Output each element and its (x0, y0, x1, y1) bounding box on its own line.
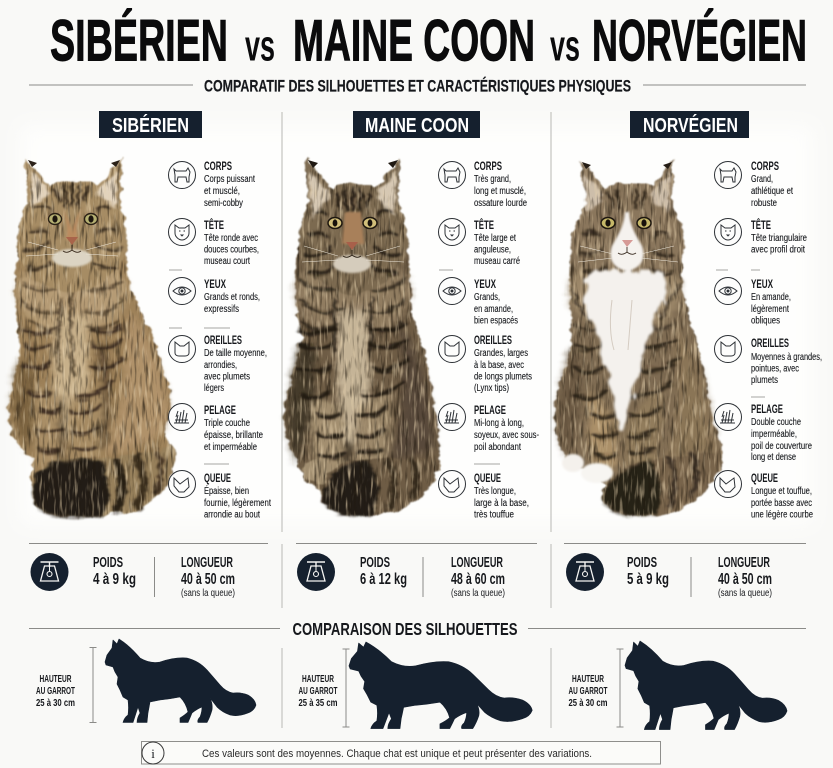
trait: corps: CORPS (474, 159, 502, 173)
trait: corps: ossature lourde (474, 198, 527, 209)
trait: pelage (168, 403, 263, 453)
poids: POIDS (93, 555, 123, 571)
silhouette: Maine Coon (349, 642, 532, 729)
height bracket: Maine Coon (342, 649, 350, 727)
trait: queue: très touffue (474, 510, 514, 520)
trait: queue (714, 470, 813, 520)
height label: Norvégien: AU GARROT (568, 685, 608, 697)
trait: yeux: En amande, (751, 292, 791, 303)
poids (360, 555, 407, 588)
heading: comparaison: COMPARAISON DES SILHOUETTES (292, 619, 518, 639)
silhouette: Norvégien (625, 641, 787, 730)
icon: scale (297, 553, 335, 591)
trait: yeux: YEUX (751, 277, 773, 291)
trait: yeux (168, 277, 260, 315)
white chest (582, 269, 667, 432)
trait: yeux: en amande, (474, 304, 513, 315)
trait: oreilles (438, 333, 532, 394)
trait: yeux (714, 277, 791, 326)
trait: oreilles: (Lynx tips) (474, 383, 509, 394)
height label: Sibérien: 25 à 30 cm (36, 697, 75, 709)
longueur: LONGUEUR (181, 555, 233, 571)
trait: tête (168, 217, 259, 267)
trait: queue: Épaisse, bien (204, 484, 249, 497)
icon: info (142, 742, 164, 764)
trait: queue: large à la base, (474, 498, 529, 509)
stats: Norvégien (566, 553, 772, 599)
trait: yeux: Grands et ronds, (204, 292, 260, 303)
trait: pelage: soyeux, avec sous- (474, 430, 539, 441)
height label: Sibérien: HAUTEUR (40, 673, 72, 685)
trait: oreilles (714, 336, 822, 386)
trait: oreilles: plumets (751, 375, 778, 386)
height label: Norvégien: HAUTEUR (572, 673, 604, 685)
trait: corps: CORPS (204, 159, 232, 173)
poids: 6 à 12 kg (360, 571, 407, 588)
height label: Norvégien (568, 673, 608, 709)
height bracket: Norvégien (616, 649, 624, 727)
badge: Maine Coon: MAINE COON (365, 115, 469, 137)
trait: pelage: PELAGE (751, 402, 783, 416)
trait: corps: et musclé, (204, 186, 240, 197)
title: vs (245, 22, 275, 70)
trait: corps: long et musclé, (474, 186, 526, 197)
trait: queue: portée basse avec (751, 498, 812, 509)
cat: Sibérien (8, 158, 175, 518)
height label: Maine Coon: 25 à 35 cm (298, 697, 338, 709)
trait: pelage: et imperméable (204, 442, 257, 453)
poids: 4 à 9 kg (93, 571, 136, 588)
trait: tête (438, 217, 520, 267)
poids: 5 à 9 kg (627, 571, 669, 588)
height label: Maine Coon (298, 673, 338, 709)
trait: oreilles: à la base, avec (474, 360, 524, 371)
trait: queue: QUEUE (474, 471, 501, 485)
trait: queue (168, 470, 271, 520)
trait: tête: TÊTE (474, 217, 494, 232)
poids: POIDS (360, 555, 390, 571)
trait: oreilles: De taille moyenne, (204, 348, 267, 359)
height label: Maine Coon: AU GARROT (298, 685, 338, 697)
badge: Norvégien: NORVÉGIEN (643, 114, 738, 137)
badge: Sibérien (99, 111, 202, 138)
icon: scale (566, 553, 604, 591)
trait: yeux: Grands, (474, 292, 500, 303)
trait: oreilles: de longs plumets (474, 372, 532, 382)
stats: Maine Coon (297, 553, 505, 599)
trait: yeux: légèrement (751, 304, 789, 315)
trait: pelage: Double couche (751, 417, 801, 428)
trait: oreilles: OREILLES (474, 333, 512, 347)
trait: corps: Très grand, (474, 174, 511, 185)
trait: yeux: bien espacés (474, 316, 518, 326)
trait: tête: Tête ronde avec (204, 233, 258, 244)
trait: yeux: expressifs (204, 304, 239, 315)
trait: oreilles: pointues, avec (751, 364, 799, 374)
trait: corps: Corps puissant (204, 174, 255, 185)
trait: pelage: poil de couverture (751, 441, 812, 452)
longueur (718, 555, 772, 599)
trait: corps: robuste (751, 198, 777, 209)
trait: tête: museau carré (474, 256, 520, 267)
note text: Ces valeurs sont des moyennes. Chaque chat est unique et peut présenter des variations. (202, 748, 592, 760)
trait: queue: QUEUE (751, 471, 778, 485)
trait: tête: Tête triangulaire (751, 233, 807, 244)
trait: pelage: imperméable, (751, 429, 797, 440)
trait: pelage: poil abondant (474, 442, 521, 453)
trait: tête: anguleuse, (474, 244, 511, 256)
height label: Norvégien: 25 à 30 cm (568, 697, 608, 709)
poids (93, 555, 136, 588)
longueur: (sans la queue) (718, 588, 772, 599)
title (50, 8, 807, 74)
longueur: 48 à 60 cm (451, 571, 505, 588)
trait: tête: museau court (204, 256, 250, 267)
badge: Maine Coon (353, 111, 480, 138)
trait: corps: CORPS (751, 159, 779, 173)
trait: tête: Tête large et (474, 233, 516, 244)
longueur: 40 à 50 cm (181, 571, 235, 588)
longueur: (sans la queue) (181, 588, 235, 599)
subtitle: COMPARATIF DES SILHOUETTES ET CARACTÉRISTIQUES PHYSIQUES (204, 76, 631, 96)
trait: pelage: Triple couche (204, 418, 250, 429)
trait: pelage: PELAGE (204, 403, 236, 417)
cat: Maine Coon (284, 158, 440, 517)
trait: oreilles: Grandes, larges (474, 348, 528, 359)
longueur: (sans la queue) (451, 588, 505, 599)
trait: pelage: épaisse, brillante (204, 430, 263, 441)
trait: pelage: PELAGE (474, 403, 506, 417)
cat: Norvégien (554, 160, 722, 517)
trait: yeux: obliques (751, 316, 780, 326)
badge: Sibérien: SIBÉRIEN (112, 114, 189, 137)
trait: oreilles: avec plumets (204, 372, 250, 382)
trait: queue: arrondie au bout (204, 510, 260, 520)
traits: Sibérien (168, 159, 271, 520)
title: vs (550, 22, 580, 70)
traits: Norvégien (714, 159, 822, 520)
trait: oreilles: OREILLES (751, 336, 789, 350)
height bracket: Sibérien (90, 648, 96, 722)
trait: queue: QUEUE (204, 471, 231, 485)
longueur: LONGUEUR (718, 555, 770, 571)
trait: tête: avec profil droit (751, 244, 805, 256)
trait: tête: TÊTE (204, 217, 224, 232)
trait: pelage (714, 402, 812, 463)
trait: corps: Grand, (751, 174, 773, 185)
trait: yeux: YEUX (474, 277, 496, 291)
note box (142, 742, 660, 764)
trait: tête (714, 217, 807, 256)
badge: Norvégien (630, 111, 749, 138)
trait: oreilles: légers (204, 383, 224, 394)
silhouette: Sibérien (105, 639, 256, 722)
trait: corps: semi-cobby (204, 198, 243, 209)
trait: queue: Très longue, (474, 486, 516, 497)
icon: scale (30, 553, 68, 591)
trait: tête: TÊTE (751, 217, 771, 232)
trait: corps (714, 159, 793, 209)
trait: yeux: YEUX (204, 277, 226, 291)
trait: pelage (438, 403, 539, 453)
trait: queue (438, 470, 529, 520)
title: SIBÉRIEN (50, 8, 228, 74)
longueur: 40 à 50 cm (718, 571, 772, 588)
poids (627, 555, 669, 588)
trait: corps (438, 159, 527, 209)
poids: POIDS (627, 555, 657, 571)
stats: Sibérien (30, 553, 235, 599)
title: MAINE COON (293, 8, 535, 74)
trait: oreilles: arrondies, (204, 360, 237, 371)
trait: yeux (438, 277, 518, 326)
trait: tête: douces courbes, (204, 244, 259, 256)
longueur: LONGUEUR (451, 555, 503, 571)
trait: corps: athlétique et (751, 186, 793, 197)
trait: queue: une légère courbe (751, 510, 813, 520)
longueur (181, 555, 235, 599)
traits: Maine Coon (438, 159, 539, 520)
trait: corps (168, 159, 255, 209)
trait: queue: Longue et touffue, (751, 486, 812, 497)
icon: info: i (151, 746, 155, 761)
height label: Sibérien (36, 673, 75, 709)
trait: queue: fournie, légèrement (204, 498, 271, 509)
longueur (451, 555, 505, 599)
trait: pelage: long et dense (751, 452, 796, 463)
height label: Maine Coon: HAUTEUR (302, 673, 334, 685)
trait: pelage: Mi-long à long, (474, 418, 524, 429)
trait: oreilles (168, 333, 267, 394)
height label: Sibérien: AU GARROT (36, 685, 75, 697)
trait: oreilles: OREILLES (204, 333, 242, 347)
